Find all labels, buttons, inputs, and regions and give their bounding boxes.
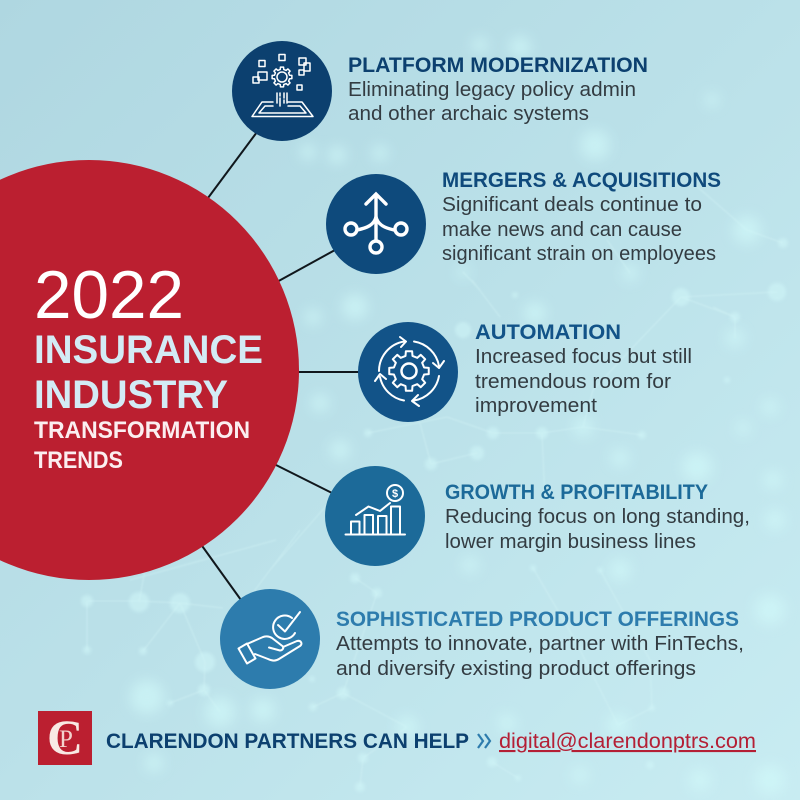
title: insurance industry — [34, 328, 263, 417]
panel: red title circle — [0, 160, 299, 580]
icon: growth and profitability — [325, 466, 425, 566]
text: mergers and acquisitions: significant strain on employees — [442, 243, 716, 265]
text: automation: tremendous room for — [475, 371, 671, 393]
logo: Clarendon Partners: P — [59, 726, 73, 753]
subtitle: TRANSFORMATION — [34, 417, 250, 444]
text: mergers and acquisitions — [442, 168, 721, 265]
text: sophisticated product offerings: and diversify existing product offerings — [336, 658, 696, 680]
text: mergers and acquisitions: MERGERS & ACQUISITIONS — [442, 168, 721, 192]
text: automation: Increased focus but still — [475, 346, 692, 368]
text: sophisticated product offerings: SOPHISTICATED PRODUCT OFFERINGS — [336, 607, 739, 631]
subtitle: TRENDS — [34, 447, 123, 474]
icon: automation — [358, 322, 458, 422]
logo: Clarendon Partners: C — [47, 709, 83, 765]
icon: platform modernization — [232, 41, 332, 141]
text: growth and profitability: Reducing focus on long standing, — [445, 506, 750, 528]
dollar sign: $ — [392, 488, 398, 500]
footer call to action: CLARENDON PARTNERS CAN HELP — [106, 729, 469, 753]
title: insurance industry: INDUSTRY — [34, 373, 228, 417]
text: growth and profitability — [445, 480, 750, 553]
text: platform modernization: and other archaic systems — [348, 103, 589, 125]
title: insurance industry: INSURANCE — [34, 328, 263, 372]
title year: 2022 — [34, 257, 184, 333]
text: sophisticated product offerings — [336, 607, 744, 680]
logo: Clarendon Partners — [38, 709, 92, 765]
email link: digital@clarendonptrs.com — [499, 730, 756, 753]
icon: sophisticated product offerings — [220, 589, 320, 689]
subtitle — [34, 417, 250, 474]
icon: mergers and acquisitions — [326, 174, 426, 274]
text: platform modernization: Eliminating legacy policy admin — [348, 79, 636, 101]
arrows — [478, 734, 490, 748]
text: platform modernization — [348, 53, 648, 125]
text: growth and profitability: GROWTH & PROFITABILITY — [445, 480, 708, 504]
text: mergers and acquisitions: make news and can cause — [442, 219, 682, 241]
text: growth and profitability: lower margin business lines — [445, 531, 696, 553]
connector lines — [200, 132, 360, 600]
footer call to action — [106, 729, 756, 753]
text: platform modernization: PLATFORM MODERNIZATION — [348, 53, 648, 77]
text: sophisticated product offerings: Attempts to innovate, partner with FinTechs, — [336, 633, 744, 655]
text: mergers and acquisitions: Significant deals continue to — [442, 194, 702, 216]
text: automation — [475, 320, 692, 417]
text: automation: AUTOMATION — [475, 320, 621, 344]
text: automation: improvement — [475, 395, 597, 417]
